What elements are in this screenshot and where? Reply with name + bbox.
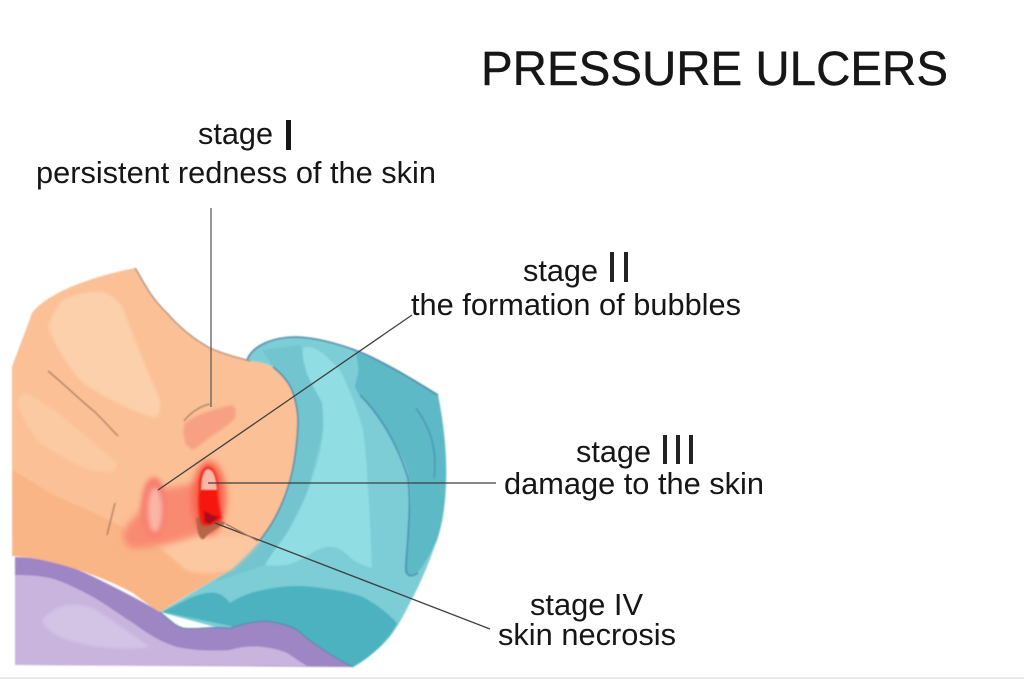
- label: stage IV: [498, 587, 676, 652]
- stage II and III wounds: bubbles, damage and necrosis: [123, 461, 226, 548]
- label: stage II: the formation of bubbles: [411, 287, 741, 322]
- skin: [12, 268, 298, 612]
- label: stage I: [36, 116, 436, 190]
- illustration: patient neck on pillow: [12, 268, 446, 667]
- label: stage I: persistent redness of the skin: [36, 155, 436, 190]
- label: stage II: [411, 252, 741, 322]
- label: stage III: [504, 434, 764, 501]
- label: stage I: stage: [198, 116, 273, 151]
- stage I wound: redness: [184, 405, 236, 450]
- sheet: [15, 557, 353, 667]
- label: stage II: stage: [523, 253, 598, 288]
- label: stage III: damage to the skin: [504, 466, 764, 501]
- label: stage IV: stage IV: [530, 587, 643, 622]
- title: PRESSURE ULCERS: [481, 42, 948, 96]
- label: stage III: stage: [576, 434, 651, 469]
- label: stage IV: skin necrosis: [498, 617, 676, 652]
- pillow: [160, 337, 446, 667]
- leader lines: [158, 208, 496, 629]
